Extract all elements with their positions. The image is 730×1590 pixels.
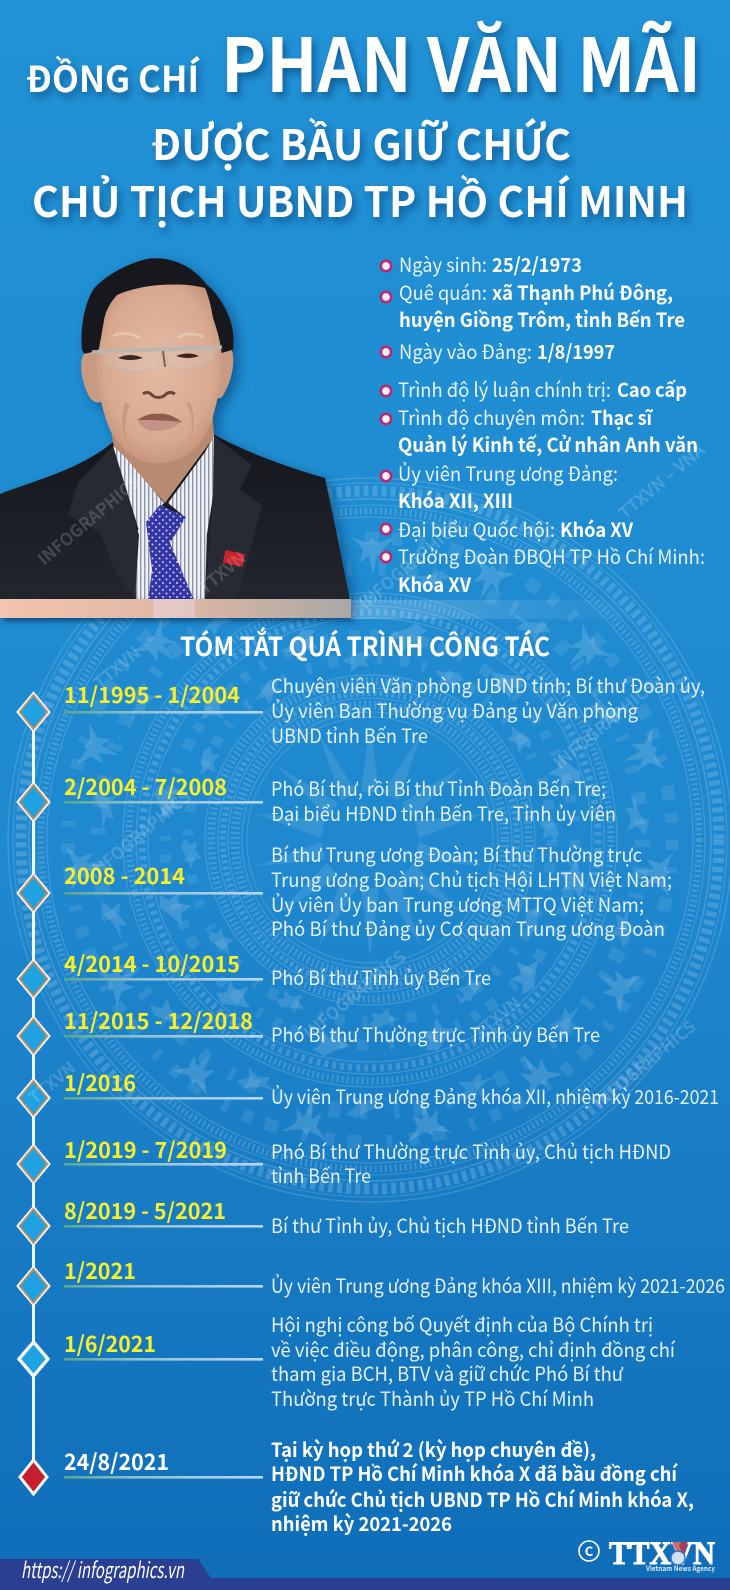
personal details list: xã Thạnh Phú Đông, (492, 277, 673, 306)
timeline entry: 1/2016: 1/2016 (64, 1066, 136, 1098)
watermarks: INFOGRAPHICS (31, 469, 144, 570)
timeline entry: 1/6/2021 (19, 1309, 676, 1412)
personal details list: Trưởng Đoàn ĐBQH TP Hồ Chí Minh: (398, 541, 705, 570)
timeline entry: 1/6/2021: Thường trực Thành ủy TP Hồ Chí Minh (271, 1383, 594, 1412)
timeline entry: 11/1995 - 1/2004: UBND tỉnh Bến Tre (271, 720, 428, 749)
timeline entry: 24/8/2021: HĐND TP Hồ Chí Minh khóa X đã bầu đồng chí (271, 1458, 678, 1487)
TTXVN logo (579, 1536, 715, 1574)
personal details list: Quê quán: (399, 277, 487, 306)
timeline entry: 1/2019 - 7/2019: tỉnh Bến Tre (271, 1160, 371, 1189)
timeline entry: 8/2019 - 5/2021 (18, 1194, 629, 1244)
watermarks: TTXVN (192, 544, 250, 599)
watermarks: TTXVN (467, 989, 525, 1044)
timeline entry: 1/2019 - 7/2019 (18, 1133, 671, 1189)
TTXVN logo: Vietnam News Agency (645, 1564, 715, 1574)
band fade (351, 600, 651, 619)
personal details list: Trình độ chuyên môn: (398, 402, 585, 431)
personal details list: Ngày sinh: (399, 249, 487, 278)
neck (110, 405, 214, 503)
tie over band (153, 599, 195, 618)
timeline entry: 8/2019 - 5/2021: 8/2019 - 5/2021 (64, 1194, 226, 1226)
watermarks: TTXVN (22, 1054, 80, 1109)
timeline entry: 1/2021 (18, 1254, 725, 1304)
face (96, 284, 222, 463)
watermarks (22, 437, 709, 1114)
timeline entry: 2008 - 2014: 2008 - 2014 (64, 859, 185, 891)
lapels (68, 436, 262, 600)
bullet markers (381, 261, 391, 562)
photo caption band (0, 599, 351, 618)
timeline entry: 1/2019 - 7/2019: 1/2019 - 7/2019 (64, 1133, 227, 1165)
timeline entry: 1/6/2021: về việc điều động, phân công, chỉ định đồng chí (271, 1334, 676, 1363)
timeline entry: 24/8/2021: 24/8/2021 (64, 1445, 169, 1477)
mouth lower lip (137, 420, 182, 431)
personal details list: 1/8/1997 (537, 336, 615, 365)
party pin (223, 550, 245, 567)
personal details list: Ủy viên Trung ương Đảng: (398, 458, 618, 487)
watermarks: INFOGRAPHICS (352, 513, 465, 614)
portrait photo (0, 258, 651, 619)
mouth upper lip (137, 414, 182, 422)
footer bar (0, 1559, 730, 1590)
personal details list: Khóa XV (560, 514, 634, 543)
timeline entry: 2008 - 2014: Bí thư Trung ương Đoàn; Bí thư Thường trực (271, 839, 642, 868)
title: ĐƯỢC BẦU GIỮ CHỨC (151, 112, 571, 173)
watermarks: INFOGRAPHICS (587, 1013, 700, 1114)
right ear (214, 350, 233, 398)
watermarks: TTXVN – VNA (612, 437, 709, 524)
timeline spine (32, 712, 35, 1477)
hair (81, 258, 233, 368)
shirt (135, 515, 207, 600)
nose (143, 392, 175, 398)
timeline entry: 2/2004 - 7/2008: Đại biểu HĐND tỉnh Bến Tre, Tỉnh ủy viên (271, 798, 616, 827)
timeline entry: 1/6/2021: tham gia BCH, BTV và giữ chức Phó Bí thư (271, 1358, 624, 1387)
watermarks: INFOGRAPHICS (547, 673, 660, 774)
timeline entry: 11/1995 - 1/2004: 11/1995 - 1/2004 (64, 678, 240, 710)
timeline entry: 11/2015 - 12/2018 (18, 1004, 600, 1054)
timeline entry: 4/2014 - 10/2015: 4/2014 - 10/2015 (64, 947, 240, 979)
timeline entry: 11/1995 - 1/2004: Chuyên viên Văn phòng UBND tỉnh; Bí thư Đoàn ủy, (271, 670, 705, 699)
left ear (81, 350, 104, 402)
timeline entry: 11/2015 - 12/2018: 11/2015 - 12/2018 (64, 1004, 253, 1036)
personal details list: Cao cấp (617, 374, 687, 403)
timeline entry: 1/6/2021: Hội nghị công bố Quyết định của Bộ Chính trị (271, 1309, 653, 1338)
personal details list: Khóa XV (398, 569, 472, 598)
timeline entry: 2008 - 2014: Phó Bí thư Đảng ủy Cơ quan Trung ương Đoàn (271, 913, 665, 942)
timeline entry: 24/8/2021: giữ chức Chủ tịch UBND TP Hồ Chí Minh khóa X, (271, 1484, 694, 1513)
timeline entry: 1/6/2021: 1/6/2021 (64, 1327, 156, 1359)
career summary heading: TÓM TẮT QUÁ TRÌNH CÔNG TÁC (180, 627, 550, 664)
timeline entry: 8/2019 - 5/2021: Bí thư Tỉnh ủy, Chủ tịch HĐND tỉnh Bến Tre (271, 1210, 629, 1239)
timeline entry: 4/2014 - 10/2015 (18, 947, 491, 997)
eyes (118, 354, 199, 360)
collar (113, 436, 214, 534)
personal details list: Thạc sĩ (591, 402, 654, 431)
personal details list: Ngày vào Đảng: (399, 336, 532, 365)
personal details list: 25/2/1973 (492, 249, 582, 278)
title: ĐỒNG CHÍ (26, 51, 200, 103)
title: PHAN VĂN MÃI (221, 7, 701, 114)
timeline entry: 1/2019 - 7/2019: Phó Bí thư Thường trực Tỉnh ủy, Chủ tịch HĐND (271, 1136, 671, 1165)
timeline entry: 11/2015 - 12/2018: Phó Bí thư Thường trực Tỉnh ủy Bến Tre (271, 1019, 600, 1048)
timeline entry: 2/2004 - 7/2008: Phó Bí thư, rồi Bí thư Tỉnh Đoàn Bến Tre; (271, 773, 606, 802)
personal details list: Quản lý Kinh tế, Cử nhân Anh văn (398, 429, 698, 458)
personal details list: Trình độ lý luận chính trị: (398, 374, 611, 403)
personal details list: huyện Giồng Trôm, tỉnh Bến Tre (399, 304, 685, 333)
tie (146, 505, 194, 600)
timeline entry: 2008 - 2014: Ủy viên Ủy ban Trung ương MTTQ Việt Nam; (271, 889, 644, 918)
TTXVN logo: C (585, 1541, 594, 1560)
personal details list: Khóa XII, XIII (398, 485, 513, 514)
watermarks: INFOGRAPHICS (82, 783, 195, 884)
timeline entry: 4/2014 - 10/2015: Phó Bí thư Tỉnh ủy Bến Tre (271, 962, 491, 991)
timeline entry: 24/8/2021 (20, 1434, 694, 1537)
timeline entry: 2/2004 - 7/2008: 2/2004 - 7/2008 (64, 770, 227, 802)
title (26, 7, 701, 230)
suit (0, 435, 350, 600)
bronze drum pattern background (8, 478, 730, 1202)
face shading (122, 402, 194, 445)
watermarks: TTXVN (87, 639, 145, 694)
timeline entry: 11/1995 - 1/2004 (18, 670, 705, 749)
website address: https:// infographics.vn (21, 1553, 185, 1585)
watermarks: INFOGRAPHICS (297, 943, 410, 1044)
timeline entry: 24/8/2021: nhiệm kỳ 2021-2026 (271, 1508, 452, 1537)
TTXVN logo: TTXVN (609, 1536, 715, 1572)
personal details list (381, 249, 705, 598)
timeline entry: 1/2016 (18, 1066, 719, 1116)
title: CHỦ TỊCH UBND TP HỒ CHÍ MINH (32, 169, 688, 230)
personal details list: Đại biểu Quốc hội: (398, 514, 555, 543)
timeline entry: 2008 - 2014: Trung ương Đoàn; Chủ tịch Hội LHTN Việt Nam; (271, 864, 672, 893)
timeline entry: 11/1995 - 1/2004: Ủy viên Ban Thường vụ Đảng ủy Văn phòng (271, 695, 638, 724)
timeline entry: 2/2004 - 7/2008 (18, 770, 616, 827)
glasses (92, 347, 222, 371)
eyebrows (113, 333, 204, 338)
timeline entry: 24/8/2021: Tại kỳ họp thứ 2 (kỳ họp chuyên đề), (271, 1434, 596, 1463)
timeline entry: 1/2021: 1/2021 (64, 1254, 136, 1286)
timeline entry: 2008 - 2014 (18, 839, 672, 942)
